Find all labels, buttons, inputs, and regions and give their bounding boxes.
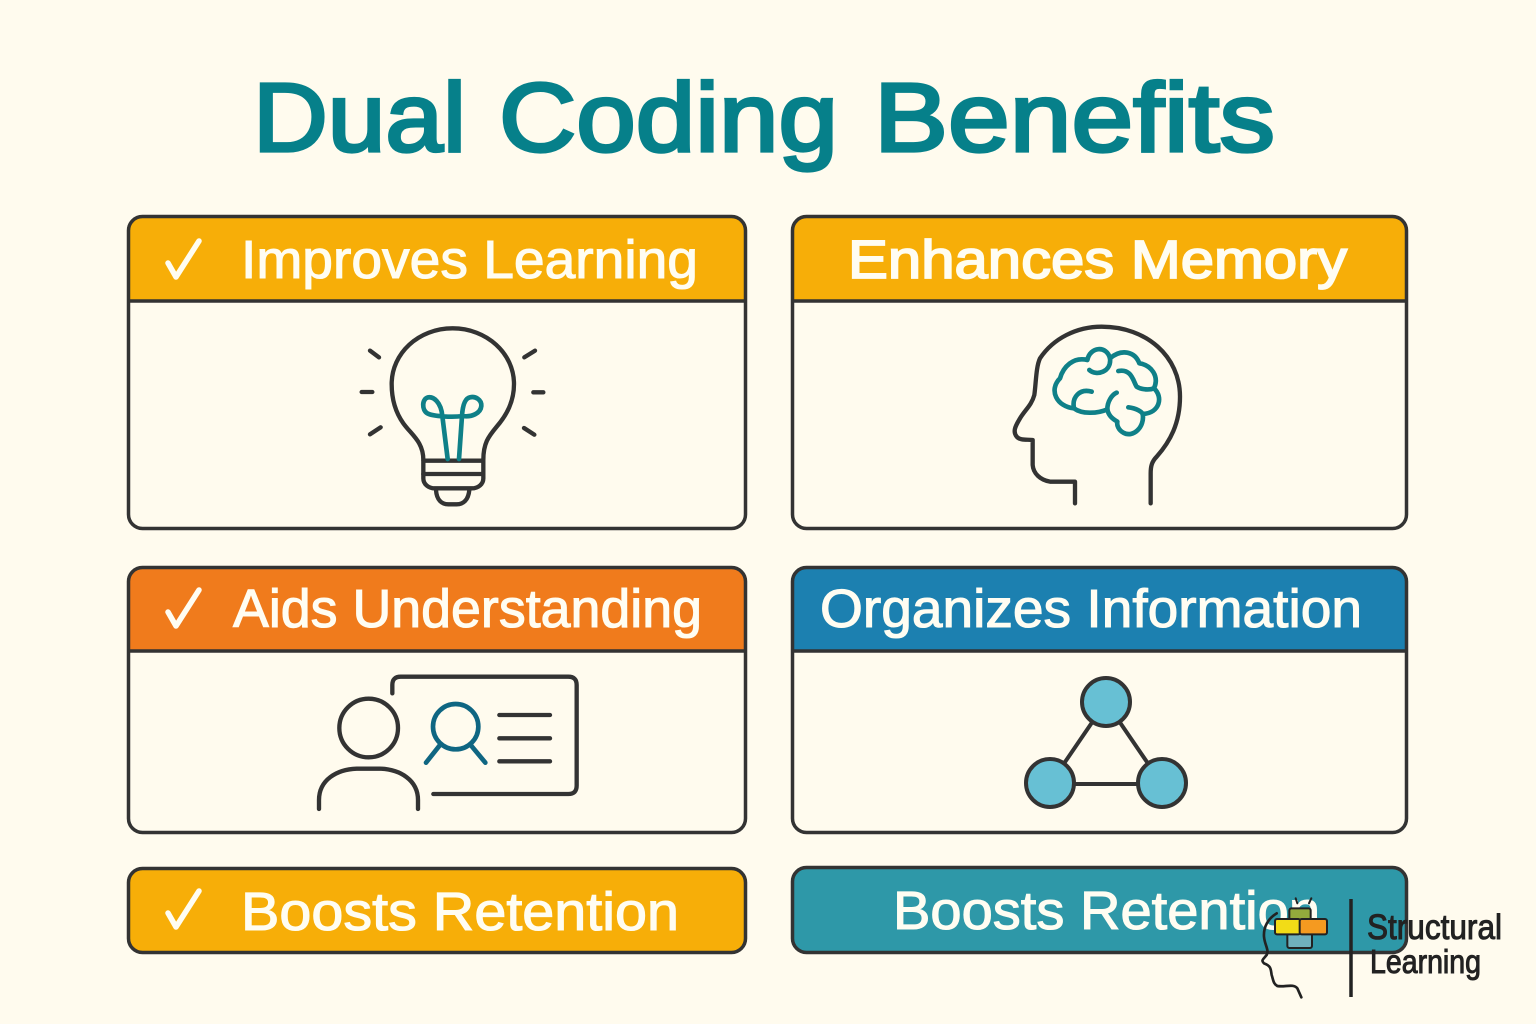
icon: logo head and blocks <box>1262 898 1327 997</box>
panel: boosts retention teal <box>792 868 1406 952</box>
heading: organizes information: Organizes Information <box>820 579 1362 639</box>
panel: improves learning <box>128 216 746 528</box>
icon: check mark <box>168 241 199 277</box>
heading: boosts retention: Boosts Retention <box>893 881 1320 941</box>
icon: light bulb <box>362 328 543 504</box>
heading: aids understanding: Aids Understanding <box>233 579 702 639</box>
heading: enhances memory: Enhances Memory <box>848 230 1347 290</box>
title: Benefits <box>874 63 1275 172</box>
panel: enhances memory <box>792 216 1407 528</box>
heading: improves learning: Improves Learning <box>241 230 698 290</box>
logo wordmark: Structural <box>1367 908 1502 947</box>
title: Dual <box>253 63 466 172</box>
icon: check mark <box>168 590 199 626</box>
title <box>253 63 1275 172</box>
panel: organizes information <box>792 568 1407 832</box>
icon: check mark <box>168 891 199 927</box>
panel: aids understanding <box>128 568 746 832</box>
panel: boosts retention yellow <box>128 868 746 952</box>
logo wordmark <box>1367 908 1502 980</box>
icon: connected network triangle <box>1026 678 1186 807</box>
icon: person with search card <box>319 677 577 809</box>
logo wordmark: Learning <box>1370 943 1481 980</box>
heading: boosts retention: Boosts Retention <box>241 882 679 942</box>
logo: structural learning <box>1262 898 1502 997</box>
logo divider <box>1349 899 1353 997</box>
icon: head with brain <box>1015 327 1180 503</box>
title: Coding <box>499 63 838 172</box>
